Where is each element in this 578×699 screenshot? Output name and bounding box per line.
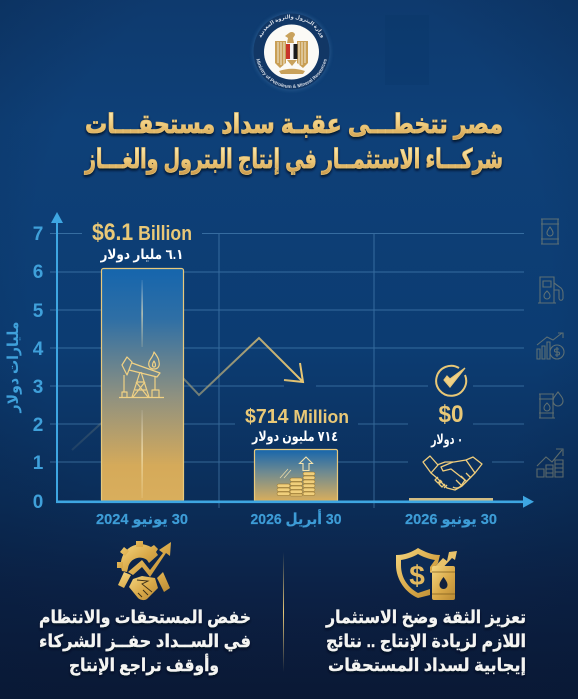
benefit text: وأوقف تراجع الإنتاج xyxy=(69,654,219,676)
y-axis numbers: 6 xyxy=(33,262,43,283)
icon: barrel with drop xyxy=(539,392,563,418)
value label: 6.1 billion: $6.1 Billion xyxy=(92,219,192,246)
x-axis labels: 30 أبريل 2026 xyxy=(250,509,342,528)
x-axis labels xyxy=(96,509,497,528)
value label: 6.1 billion: ٦.١ مليار دولار xyxy=(100,246,184,263)
x-axis labels: 30 يونيو 2024 xyxy=(96,511,188,528)
icon: fuel pump xyxy=(538,277,563,303)
panel: right benefit xyxy=(325,548,526,675)
panel: left benefit xyxy=(39,541,251,676)
decorative icons column xyxy=(537,219,564,477)
value label: zero xyxy=(430,401,464,448)
bar: June 2024 xyxy=(102,268,184,502)
value label: 714 million: ٧١٤ مليون دولار xyxy=(251,428,338,445)
panel: bar chart xyxy=(5,212,534,528)
benefit text: اللازم لزيادة الإنتاج .. نتائج xyxy=(326,631,526,652)
benefit text: في الســداد حفــز الشركاء xyxy=(39,631,251,652)
y-axis numbers: 5 xyxy=(33,301,44,322)
icon: check mark xyxy=(436,366,466,396)
y-axis numbers: 0 xyxy=(33,492,43,513)
y-axis title: مليارات دولار xyxy=(5,321,22,413)
y-axis numbers: 2 xyxy=(33,415,43,436)
value label: zero: ٠ دولار xyxy=(430,431,463,448)
bar: June 2026 xyxy=(409,498,493,502)
value label: 714 million: $714 Million xyxy=(245,406,349,428)
logo: ministry of petroleum xyxy=(252,12,331,91)
icon: growth and coins xyxy=(537,449,563,477)
x-axis labels: 30 يونيو 2026 xyxy=(405,511,497,528)
icon: shield dollar and barrel xyxy=(396,548,457,600)
divider xyxy=(283,552,284,672)
value label: 6.1 billion xyxy=(92,219,192,263)
icon: gear handshake growth xyxy=(117,541,171,600)
benefit text: خفض المستحقات والانتظام xyxy=(39,607,251,628)
icon: barrel xyxy=(541,219,559,244)
icon: handshake xyxy=(423,456,482,490)
y-axis numbers: 3 xyxy=(33,377,43,398)
icon: eagle emblem xyxy=(275,32,308,74)
icon: pump jack and flame xyxy=(119,352,164,398)
y-axis numbers: 7 xyxy=(33,224,43,245)
benefit text: إيجابية لسداد المستحقات xyxy=(328,655,526,675)
benefit text: تعزيز الثقة وضخ الاستثمار xyxy=(325,607,526,628)
icon: coins and arrow xyxy=(277,457,315,496)
benefit text xyxy=(325,607,526,675)
value label: zero: $0 xyxy=(438,401,464,428)
y-axis numbers xyxy=(33,224,44,513)
bar: April 2026 xyxy=(254,450,338,502)
y-axis numbers: 1 xyxy=(33,453,44,474)
axes xyxy=(51,212,534,508)
icon: shield dollar and barrel: $ xyxy=(409,560,425,591)
title xyxy=(84,109,503,175)
logo: ministry of petroleum: Ministry of Petroleum & Mineral Resources xyxy=(256,58,327,88)
trend arrow xyxy=(72,338,303,450)
benefit text xyxy=(39,607,251,676)
value label: 714 million xyxy=(245,406,349,445)
logo: ministry of petroleum: وزارة البترول والثروة المعدنية xyxy=(259,14,323,38)
y-axis numbers: 4 xyxy=(33,339,44,360)
icon: chart and coin xyxy=(537,333,564,359)
